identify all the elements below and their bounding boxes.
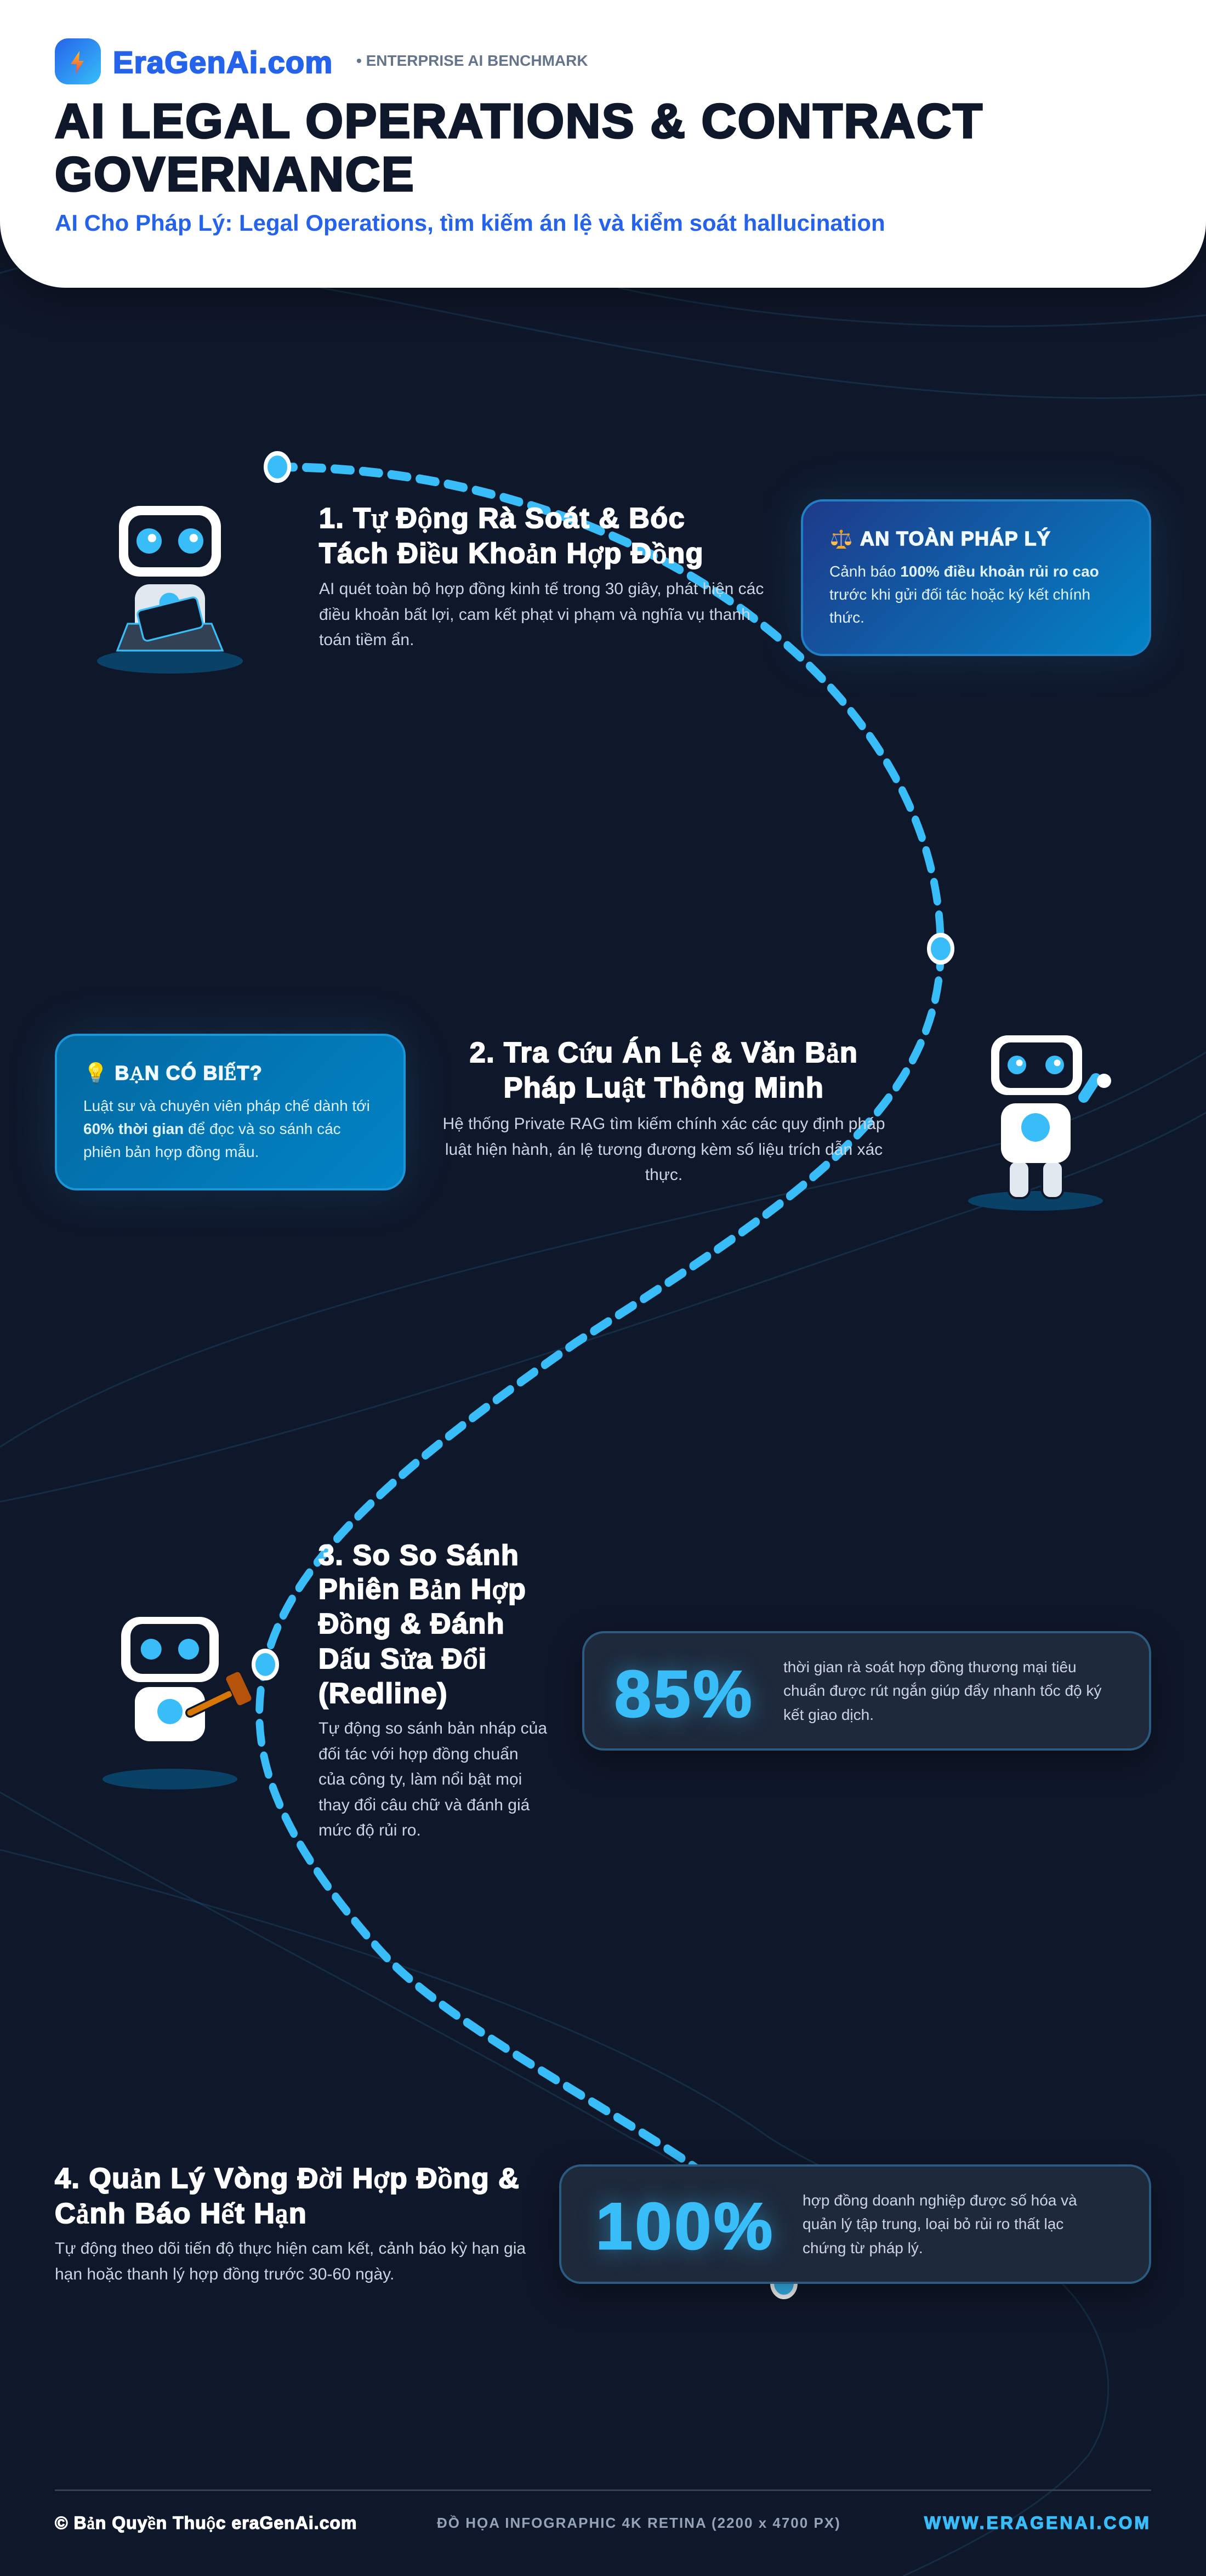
callout text: trước khi gửi đối tác hoặc ký kết chính — [829, 586, 1090, 603]
copyright: © Bản Quyền Thuộc eraGenAi.com — [55, 2513, 357, 2533]
stat text: chứng từ pháp lý. — [803, 2239, 923, 2256]
title: AI LEGAL OPERATIONS & CONTRACT — [55, 94, 983, 148]
step 2 description: thực. — [645, 1166, 682, 1184]
step 2 description: luật hiện hành, án lệ tương đương kèm số liệu trích dẫn xác — [445, 1141, 883, 1159]
step 1 description: toán tiềm ẩn. — [319, 631, 414, 649]
step 3 heading: 3. So So Sánh — [318, 1540, 519, 1571]
step 3 heading — [318, 1540, 526, 1709]
step 3 heading: Đồng & Đánh — [318, 1608, 505, 1640]
step 2 heading — [470, 1036, 858, 1104]
stat text: kết giao dịch. — [783, 1706, 874, 1723]
step 1 description: AI quét toàn bộ hợp đồng kinh tế trong 30 giây, phát hiện các — [319, 580, 764, 598]
callout text: Luật sư và chuyên viên pháp chế dành tới — [83, 1097, 370, 1114]
footer — [55, 2489, 1151, 2555]
step 4 heading — [55, 2163, 520, 2230]
callout text: thức. — [829, 609, 864, 626]
stat text: thời gian rà soát hợp đồng thương mại tiêu — [783, 1659, 1077, 1675]
callout: did you know — [55, 1034, 406, 1190]
step 2 heading: Pháp Luật Thông Minh — [504, 1072, 824, 1104]
step 4 heading: Cảnh Báo Hết Hạn — [55, 2198, 307, 2230]
tagline: • ENTERPRISE AI BENCHMARK — [356, 52, 588, 69]
stat text — [783, 1659, 1102, 1723]
callout heading: AN TOÀN PHÁP LÝ — [860, 527, 1051, 550]
callout text — [829, 563, 1099, 626]
step 3 description: đối tác với hợp đồng chuẩn — [318, 1745, 519, 1763]
callout text: phiên bản hợp đồng mẫu. — [83, 1143, 259, 1160]
stat text — [803, 2192, 1077, 2256]
callout text: Cảnh báo 100% điều khoản rủi ro cao — [829, 563, 1099, 580]
step 3 description: của công ty, làm nổi bật mọi — [318, 1770, 522, 1788]
header panel — [0, 0, 1206, 288]
step 3 description: thay đổi câu chữ và đánh giá — [318, 1796, 530, 1814]
logo icon — [55, 38, 101, 84]
step 1 heading — [319, 503, 704, 569]
stat text: hợp đồng doanh nghiệp được số hóa và — [803, 2192, 1077, 2209]
brand name: EraGenAi.com — [113, 45, 333, 79]
step 1 heading: Tách Điều Khoản Hợp Đồng — [319, 537, 704, 569]
step 1 description — [319, 580, 764, 649]
stat number: 100% — [596, 2190, 775, 2263]
step 4 heading: 4. Quản Lý Vòng Đời Hợp Đồng & — [55, 2163, 520, 2195]
step 3 description: mức độ rủi ro. — [318, 1821, 421, 1839]
stat card: 100% — [559, 2164, 1151, 2284]
callout: legal safety — [801, 499, 1151, 656]
step 3 heading: Dấu Sửa Đổi — [318, 1643, 487, 1675]
title — [55, 94, 983, 201]
step 2 description — [442, 1115, 885, 1184]
step 3 heading: (Redline) — [318, 1678, 448, 1709]
step 2 heading: 2. Tra Cứu Án Lệ & Văn Bản — [470, 1037, 858, 1069]
step 3 description: Tự động so sánh bản nháp của — [318, 1719, 547, 1737]
step 2 description: Hệ thống Private RAG tìm kiếm chính xác các quy định pháp — [442, 1115, 885, 1133]
step 1 description: điều khoản bất lợi, cam kết phạt vi phạm và nghĩa vụ thanh — [319, 606, 750, 624]
stat text: quản lý tập trung, loại bỏ rủi ro thất lạc — [803, 2215, 1063, 2232]
callout heading: 💡 BẠN CÓ BIẾT? — [83, 1062, 263, 1085]
callout text: 60% thời gian để đọc và so sánh các — [83, 1120, 341, 1137]
stat text: chuẩn được rút ngắn giúp đẩy nhanh tốc độ ký — [783, 1682, 1101, 1699]
stat card: 85% — [582, 1631, 1151, 1751]
step 3 description — [318, 1719, 547, 1839]
step 1 heading: 1. Tự Động Rà Soát & Bóc — [319, 503, 685, 534]
stat number: 85% — [615, 1657, 754, 1731]
step 4 description: Tự động theo dõi tiến độ thực hiện cam kết, cảnh báo kỳ hạn gia — [55, 2239, 526, 2258]
callout text — [83, 1097, 370, 1160]
format note: ĐỒ HỌA INFOGRAPHIC 4K RETINA (2200 x 4700 PX) — [437, 2515, 841, 2531]
subtitle: AI Cho Pháp Lý: Legal Operations, tìm kiếm án lệ và kiểm soát hallucination — [55, 210, 885, 236]
title: GOVERNANCE — [55, 147, 415, 201]
step 4 description — [55, 2239, 526, 2283]
step 3 heading: Phiên Bản Hợp — [318, 1574, 526, 1605]
step 4 description: hạn hoặc thanh lý hợp đồng trước 30-60 ngày. — [55, 2265, 394, 2283]
website: WWW.ERAGENAI.COM — [924, 2513, 1151, 2533]
